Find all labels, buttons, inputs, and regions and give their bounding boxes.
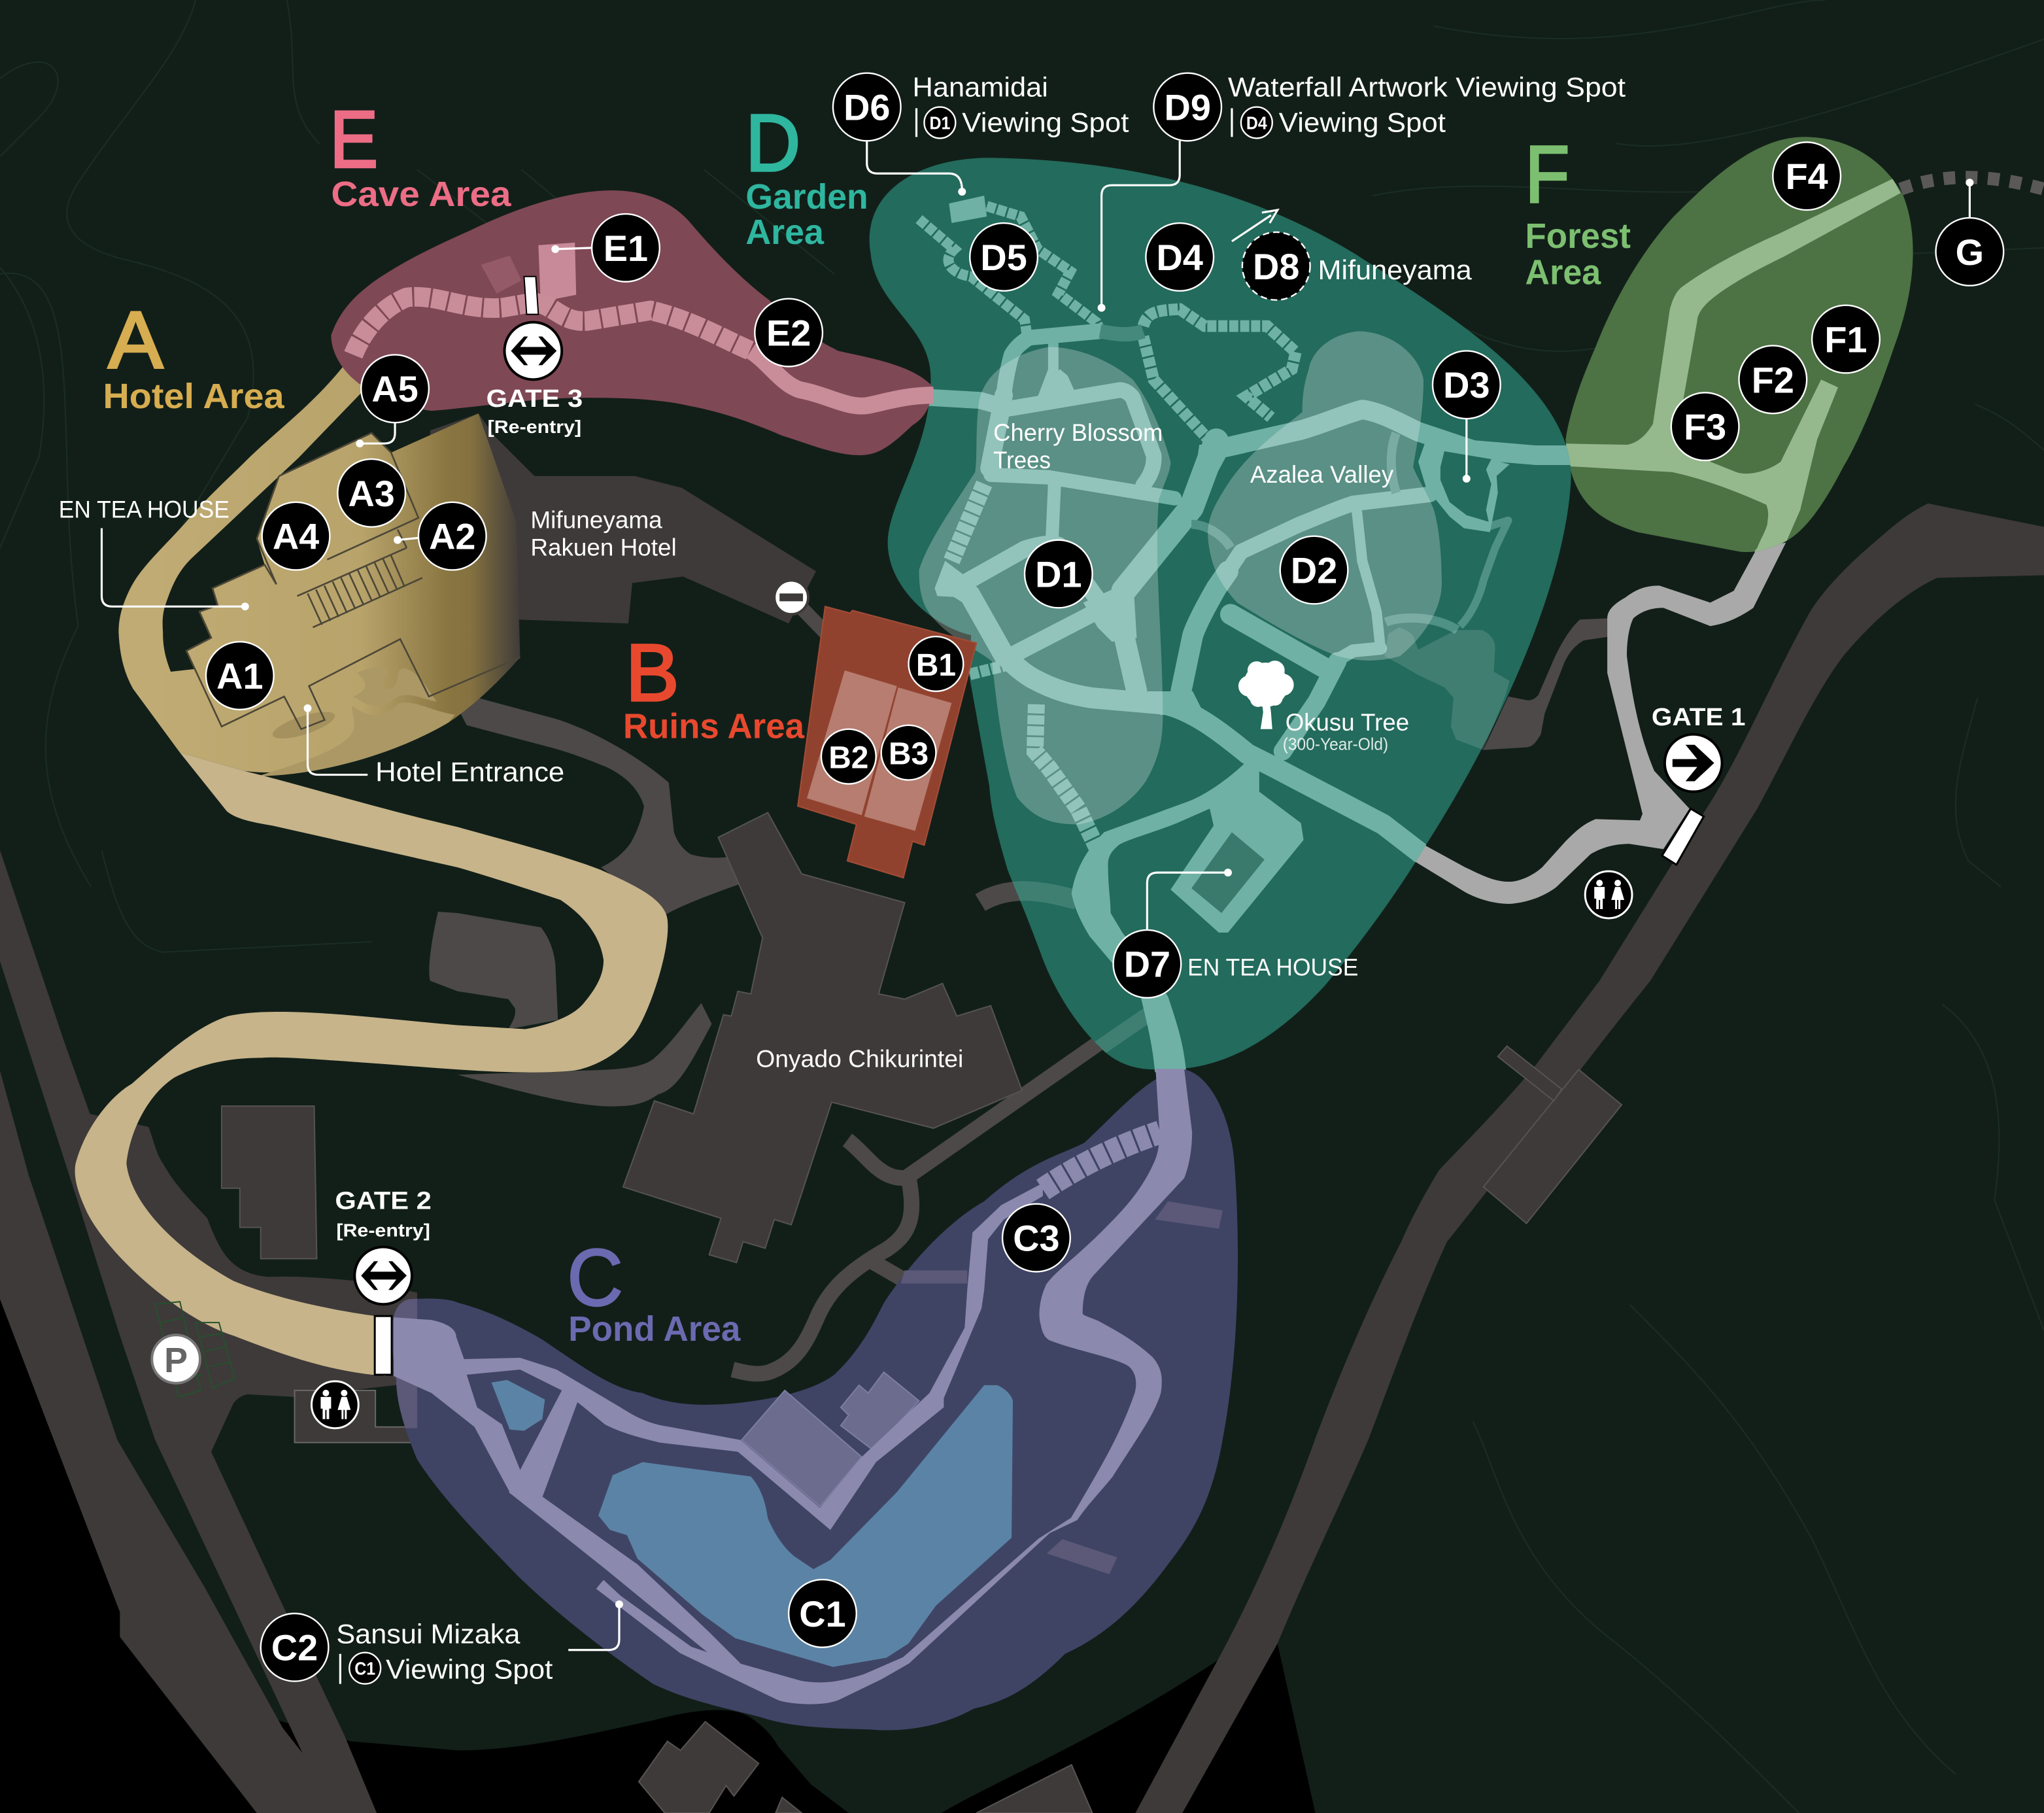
road: hotel service road (449, 690, 739, 914)
marker B3: B3 (889, 737, 928, 772)
place labels: Onyado Chikurintei (756, 1045, 963, 1072)
marker F3: F3 (1684, 406, 1726, 447)
place labels: EN TEA HOUSE (1187, 954, 1358, 981)
area title C: C (567, 1233, 623, 1323)
pond upper path (394, 1183, 1043, 1530)
leader: A2 (398, 538, 424, 540)
trail to G (1901, 177, 2044, 189)
azalea zone (1208, 332, 1442, 661)
marker D9: D9 (1165, 86, 1211, 128)
marker D3: D3 (1443, 364, 1490, 406)
area title B: B (626, 628, 679, 718)
trail link (1100, 332, 1143, 334)
building: south east (976, 1765, 1093, 1813)
leader end dots (241, 179, 1973, 1608)
icon: gate 3 two-way (505, 322, 562, 379)
area title F: Area (1525, 253, 1601, 292)
roads seen through garden (1012, 881, 1147, 1053)
place labels: Sansui Mizaka (336, 1619, 520, 1649)
place labels: Mifuneyama (1318, 254, 1473, 285)
building: annex (429, 912, 558, 1029)
area title E (330, 94, 512, 214)
leader: E1 (555, 248, 593, 249)
building: south house (639, 1721, 758, 1813)
area E: cave (331, 190, 933, 455)
main road: lower left band (0, 1071, 341, 1813)
icon: restroom gate 2 (311, 1381, 358, 1428)
leader: D9 (1102, 141, 1180, 308)
marker G: G (1956, 232, 1984, 273)
cherry blossom zone (919, 347, 1170, 824)
garden stairs (919, 206, 1296, 846)
gate 2 bar (375, 1316, 392, 1375)
viewing spot references: C1 (354, 1659, 375, 1679)
cave lower path (751, 351, 933, 406)
place labels: (300-Year-Old) (1283, 736, 1388, 754)
marker A4 (262, 502, 330, 570)
ruins plot B3 (864, 687, 951, 831)
marker A1 (206, 642, 274, 710)
marker C1: C1 (799, 1593, 846, 1634)
road: garden service path (980, 891, 1077, 903)
building: west annex (222, 1106, 316, 1258)
marker A2: A2 (429, 516, 475, 557)
place labels (59, 72, 1745, 1685)
marker A3: A3 (349, 473, 395, 514)
hotel building outline (186, 433, 520, 729)
area F: forest (1558, 137, 1913, 561)
marker B1 (909, 636, 963, 691)
leader: EN TEA HOUSE west (102, 528, 245, 606)
leader: mifuneyama arrow (1232, 210, 1278, 241)
area title A (103, 295, 285, 416)
parking stalls (155, 1302, 235, 1397)
area title D: Garden (745, 177, 868, 216)
viewing spot references: D1 (929, 112, 950, 133)
road: lower service road (458, 1003, 712, 1107)
leader: C2 (568, 1604, 619, 1650)
leader: G (1969, 182, 1970, 219)
marker A5 (361, 354, 429, 423)
marker E1: E1 (604, 228, 648, 269)
marker F2 (1739, 345, 1807, 413)
area C: pond (386, 1069, 1238, 1730)
hotel stairs (298, 548, 422, 627)
marker D9 (1153, 73, 1221, 141)
leader: D3 (1466, 417, 1467, 479)
road box seen through pond (392, 1299, 417, 1428)
D3 ring interior (1440, 451, 1491, 522)
leader: A5 (360, 420, 395, 443)
marker C1 (789, 1580, 857, 1648)
marker F2: F2 (1752, 359, 1794, 400)
area title F: F (1525, 130, 1569, 220)
ruins area building (798, 606, 976, 878)
marker D8: D8 (1253, 246, 1299, 287)
forest area shape (1565, 137, 1913, 552)
marker D5 (970, 223, 1038, 291)
marker E2: E2 (766, 312, 811, 353)
cave main building (538, 243, 576, 311)
area title D (745, 98, 868, 252)
ruins plot B2 (807, 670, 897, 815)
pond path hole (467, 1370, 562, 1470)
marker E1 (592, 214, 660, 282)
area title C: Pond Area (568, 1309, 741, 1349)
place labels: Trees (993, 447, 1051, 474)
place labels: Waterfall Artwork Viewing Spot (1228, 72, 1626, 103)
place labels: [Re-entry] (336, 1220, 430, 1241)
marker F4 (1773, 142, 1841, 210)
marker B2 (821, 729, 876, 784)
icon: restroom gate 1 (1585, 871, 1632, 918)
gate 1 bar (1662, 808, 1704, 865)
place labels: [Re-entry] (488, 417, 581, 437)
building: south small (775, 1797, 802, 1813)
marker A2 (418, 502, 486, 570)
place labels: GATE 3 (486, 385, 583, 413)
place labels: Okusu Tree (1286, 709, 1409, 736)
marker D1: D1 (1035, 553, 1082, 595)
marker F3 (1671, 392, 1739, 460)
area title A: Hotel Area (103, 377, 285, 416)
marker E2 (755, 299, 823, 366)
buildings (222, 812, 1622, 1813)
marker D8 (1242, 232, 1310, 300)
viewing spot references (340, 107, 1272, 1684)
main road: right band (1135, 504, 2044, 1813)
hotel: Mifuneyama Rakuen building (430, 413, 816, 659)
main pond water (598, 1385, 1013, 1667)
area A: hotel area shape (118, 365, 520, 772)
cave stairs (353, 297, 751, 354)
tea house plot (1191, 832, 1265, 913)
marker D2: D2 (1291, 549, 1337, 591)
area title C (567, 1233, 741, 1349)
marker G (1936, 218, 2003, 286)
marker C3: C3 (1013, 1217, 1060, 1258)
small pond water (492, 1380, 545, 1431)
pond stairs (1043, 1132, 1160, 1190)
marker D6: D6 (843, 86, 890, 128)
building: restroom (295, 1390, 411, 1443)
marker F1 (1812, 305, 1880, 373)
pond area shape (392, 1069, 1238, 1730)
place labels: Viewing Spot (386, 1654, 553, 1685)
area title E: Cave Area (331, 175, 512, 214)
black outer regions (0, 1299, 1316, 1813)
marker C2: C2 (271, 1627, 318, 1668)
marker C3 (1002, 1204, 1070, 1271)
building: bridge span (1498, 1046, 1561, 1101)
hotel garden patterns (258, 668, 455, 776)
entrance shade (270, 706, 337, 744)
cave area shape (331, 190, 932, 455)
forest paths (1558, 179, 1901, 561)
leader: D7 (1147, 872, 1228, 933)
garden area shape (870, 158, 1571, 1069)
marker D7: D7 (1124, 944, 1170, 985)
marker F4: F4 (1786, 156, 1828, 197)
icon: parking (152, 1335, 200, 1383)
marker B2: B2 (828, 741, 868, 776)
viewing spot references: D4 (1246, 112, 1267, 133)
gate 3 bar (524, 277, 538, 315)
marker F1: F1 (1824, 319, 1867, 360)
road to ruins (791, 597, 834, 642)
area title F: Forest (1525, 216, 1631, 256)
marker D4 (1146, 223, 1214, 291)
leader: hotel entrance (307, 708, 367, 775)
cave small building (481, 256, 521, 294)
area D: garden (870, 158, 1584, 1096)
main road: upper left band (0, 850, 417, 1813)
D3 ring path (1418, 443, 1498, 532)
icon: parking: P (164, 1341, 188, 1380)
marker D3 (1433, 351, 1501, 419)
ruins outer wall (798, 606, 976, 878)
place labels: Hotel Entrance (375, 757, 564, 787)
viewing building (949, 196, 987, 223)
icon: no entry (774, 580, 808, 614)
marker D4: D4 (1157, 237, 1203, 278)
pond branch stubs (901, 1201, 1223, 1574)
road: east spur (1484, 618, 1610, 750)
area title D: D (745, 98, 800, 188)
place labels: Viewing Spot (1279, 107, 1446, 137)
area title E: E (330, 94, 378, 184)
marker D1 (1025, 540, 1093, 608)
building: Onyado Chikurintei (623, 812, 1022, 1262)
pond main loop path (510, 1069, 1191, 1704)
garden main paths (913, 332, 1584, 874)
marker A1: A1 (216, 655, 264, 697)
leader: D6 (867, 141, 962, 190)
icon: gate 1 arrow (1665, 734, 1722, 792)
marker D6 (833, 73, 901, 141)
area title F (1525, 130, 1631, 292)
marker A4: A4 (273, 516, 319, 557)
garden junction fills (934, 369, 1510, 717)
marker B3 (881, 725, 936, 780)
place labels: Mifuneyama (530, 507, 662, 534)
place labels: Azalea Valley (1250, 461, 1394, 488)
area title A: A (108, 295, 163, 385)
marker C2 (261, 1614, 328, 1682)
marker B1: B1 (916, 648, 956, 683)
garden pond form (353, 668, 437, 706)
building: bridge house (1484, 1069, 1622, 1224)
pond buildings (741, 1372, 919, 1506)
place labels: Hanamidai (913, 72, 1048, 103)
area title B: Ruins Area (623, 707, 805, 746)
icon: gate 2 two-way (354, 1247, 412, 1304)
place labels: GATE 2 (335, 1188, 432, 1215)
leader lines (102, 141, 1973, 1650)
area title B (623, 628, 805, 746)
garden sweep (258, 702, 455, 776)
marker D2 (1280, 536, 1348, 604)
dim paths under azalea (1191, 433, 1508, 630)
place labels: EN TEA HOUSE (59, 496, 230, 523)
marker D5: D5 (980, 237, 1027, 278)
marker A5: A5 (371, 368, 418, 409)
east garden zone (1384, 627, 1510, 750)
tea house grounds (1072, 762, 1304, 1072)
place labels: GATE 1 (1652, 704, 1745, 731)
area title D: Area (745, 213, 825, 252)
place labels: Cherry Blossom (993, 419, 1163, 446)
gray path to gate 1 (1382, 543, 1786, 904)
road: pond service path (732, 1009, 1148, 1373)
place labels: Viewing Spot (962, 107, 1129, 137)
place labels: Rakuen Hotel (530, 534, 677, 561)
okusu tree (1238, 661, 1294, 729)
road network (0, 504, 2044, 1813)
A road south (75, 753, 668, 1376)
marker A3 (337, 459, 405, 527)
marker D7 (1114, 930, 1181, 998)
